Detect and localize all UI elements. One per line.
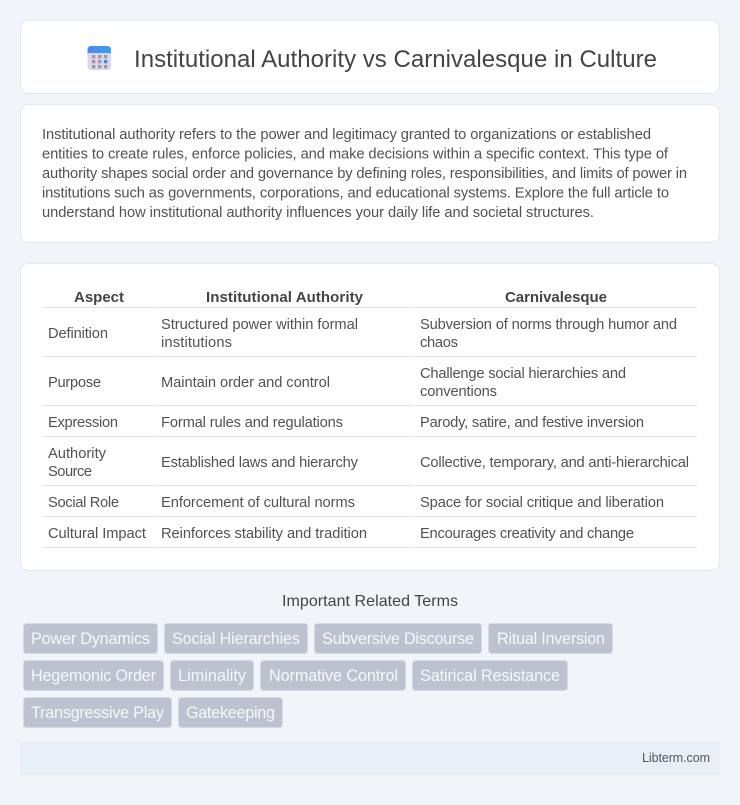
row: social role: Social Role xyxy=(48,495,119,511)
row: definition: Definition xyxy=(48,326,108,342)
table header xyxy=(74,289,607,306)
tag: Hegemonic Order: Hegemonic Order xyxy=(31,667,157,685)
row: expression xyxy=(48,415,644,431)
row: cultural impact: Reinforces stability and tradition xyxy=(161,526,367,542)
table header: Aspect xyxy=(74,289,124,306)
intro paragraph xyxy=(42,127,687,221)
related term tags xyxy=(24,624,612,728)
row: definition xyxy=(48,317,677,351)
row: definition: chaos xyxy=(420,335,458,351)
row: expression: Expression xyxy=(48,415,118,431)
intro paragraph: Institutional authority refers to the power and legitimacy granted to organizations or established xyxy=(42,127,651,143)
tag: Subversive Discourse xyxy=(314,624,482,654)
row: definition: Structured power within formal xyxy=(161,317,358,333)
tag: Satirical Resistance xyxy=(412,660,568,690)
row: cultural impact: Cultural Impact xyxy=(48,526,146,542)
intro paragraph: institutions such as governments, corporations, and educational systems. Explore the full article to xyxy=(42,186,669,202)
table header: Institutional Authority xyxy=(206,289,364,306)
icon: calendar xyxy=(88,46,111,70)
row: social role: Space for social critique and liberation xyxy=(420,495,664,511)
row: authority source: Established laws and hierarchy xyxy=(161,455,359,471)
table header: Carnivalesque xyxy=(505,289,607,306)
tag: Gatekeeping: Gatekeeping xyxy=(186,704,275,722)
row: cultural impact xyxy=(48,526,634,542)
row: cultural impact: Encourages creativity and change xyxy=(420,526,634,542)
intro paragraph: understand how institutional authority influences your daily life and societal structures. xyxy=(42,205,594,221)
tag: Social Hierarchies xyxy=(164,624,308,654)
tag: Transgressive Play: Transgressive Play xyxy=(31,704,165,722)
intro paragraph: entities to create rules, enforce policies, and make decisions within a specific context. This type of xyxy=(42,146,669,162)
row: authority source xyxy=(48,446,689,480)
row: authority source: Collective, temporary, and anti-hierarchical xyxy=(420,455,689,471)
tag: Transgressive Play xyxy=(24,698,172,728)
panel: header xyxy=(20,20,720,94)
row: social role: Enforcement of cultural norms xyxy=(161,495,355,511)
row: purpose xyxy=(48,366,626,400)
tag: Ritual Inversion: Ritual Inversion xyxy=(497,630,605,648)
tag: Hegemonic Order xyxy=(24,660,164,690)
footer: Libterm.com xyxy=(642,751,710,765)
tag: Ritual Inversion xyxy=(488,624,612,654)
intro paragraph: authority shapes social order and governance by defining roles, responsibilities, and limits of power in xyxy=(42,166,687,182)
tag: Normative Control: Normative Control xyxy=(269,667,398,685)
row: social role xyxy=(48,495,664,511)
heading: related terms: Important Related Terms xyxy=(282,593,458,610)
tag: Subversive Discourse: Subversive Discourse xyxy=(322,630,474,648)
footer xyxy=(20,741,720,775)
row: purpose: conventions xyxy=(420,384,497,400)
row: purpose: Purpose xyxy=(48,375,101,391)
row: purpose: Challenge social hierarchies and xyxy=(420,366,626,382)
row: purpose: Maintain order and control xyxy=(161,375,330,391)
row: authority source: Source xyxy=(48,464,92,480)
tag: Gatekeeping xyxy=(178,698,282,728)
row: authority source: Authority xyxy=(48,446,107,462)
panel: comparison table xyxy=(20,264,720,570)
row: definition: institutions xyxy=(161,335,232,351)
tag: Liminality: Liminality xyxy=(178,667,247,685)
tag: Social Hierarchies: Social Hierarchies xyxy=(172,630,300,648)
tag: Normative Control xyxy=(260,660,406,690)
row: expression: Parody, satire, and festive inversion xyxy=(420,415,644,431)
row: expression: Formal rules and regulations xyxy=(161,415,343,431)
tag: Power Dynamics xyxy=(24,624,158,654)
tag: Power Dynamics: Power Dynamics xyxy=(31,630,150,648)
row: definition: Subversion of norms through humor and xyxy=(420,317,677,333)
tag: Satirical Resistance: Satirical Resistance xyxy=(420,667,560,685)
tag: Liminality xyxy=(170,660,254,690)
panel: intro xyxy=(20,104,720,242)
title: Institutional Authority vs Carnivalesque in Culture xyxy=(134,46,657,73)
